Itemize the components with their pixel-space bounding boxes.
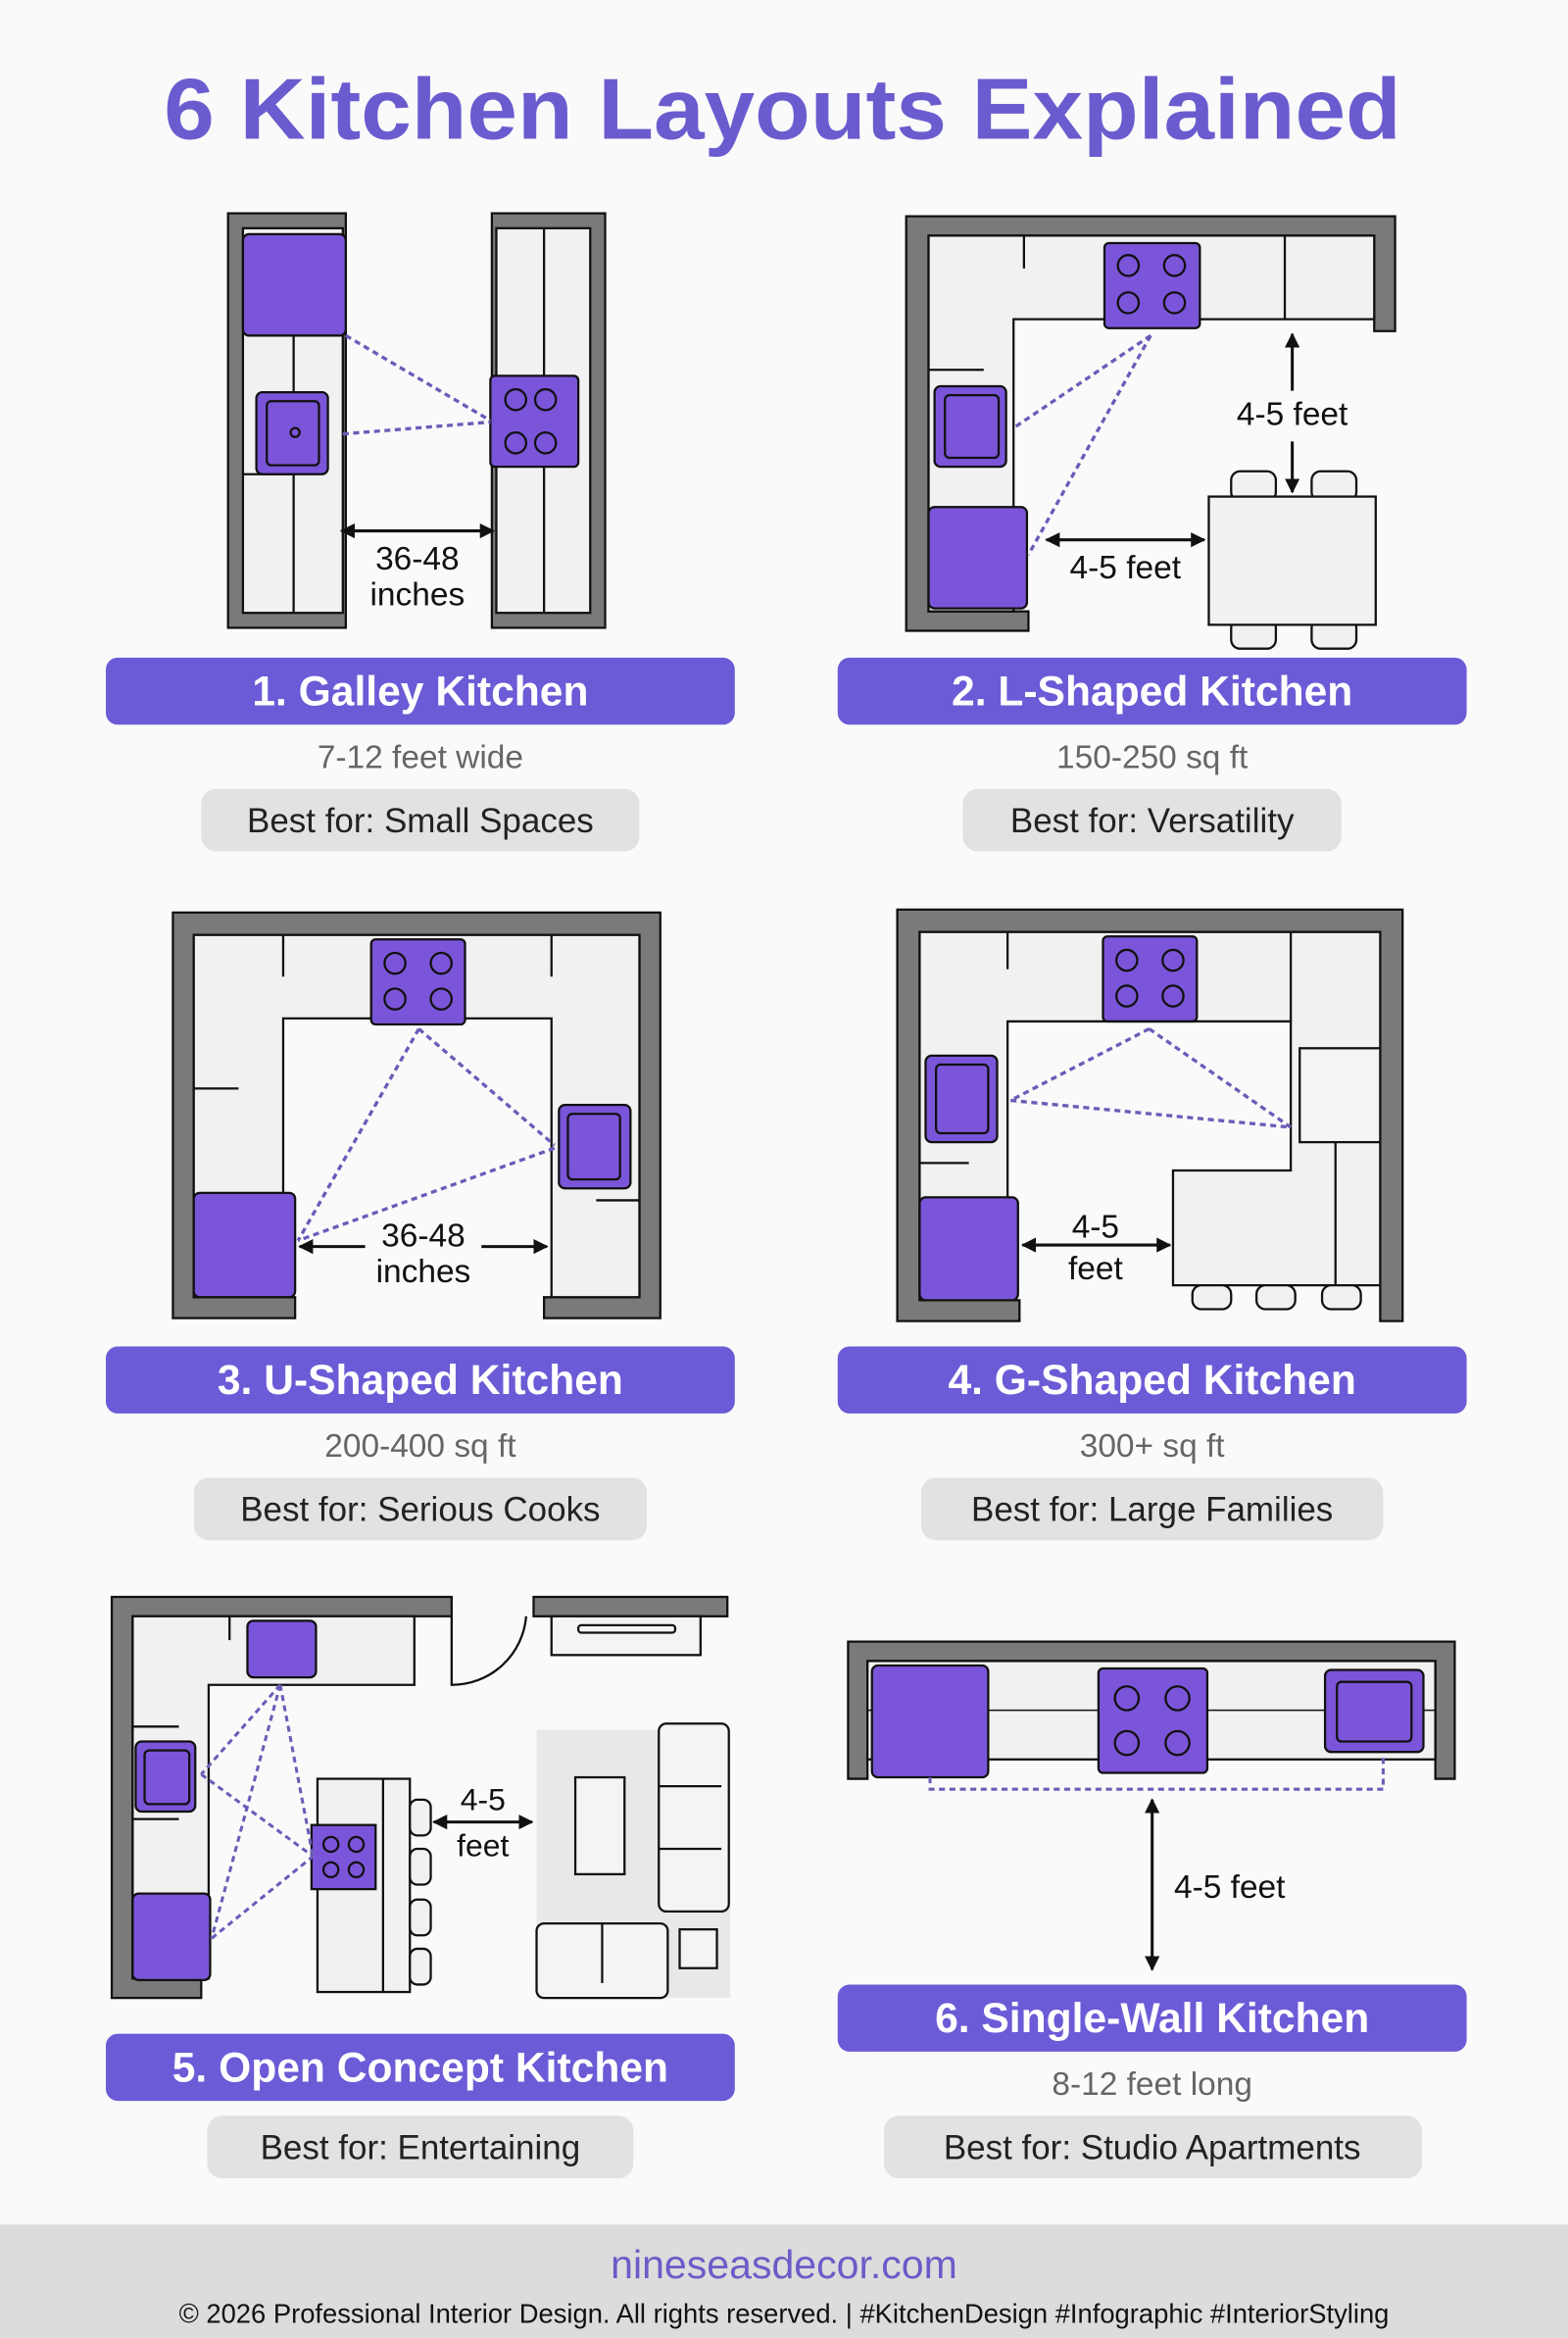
pill: U-shaped best for: [194, 1477, 647, 1540]
heading: L-shaped: [838, 658, 1467, 724]
icon: fridge: [243, 234, 346, 335]
door: [452, 1617, 526, 1685]
icon: sinks: [135, 1620, 316, 1812]
pill: G-shaped best for: Best for: Large Families: [971, 1490, 1333, 1528]
pill: open concept best for: [207, 2115, 633, 2178]
panel: open concept kitchen plan: [112, 1597, 730, 1998]
icon: sink: [257, 392, 328, 474]
pill: G-shaped best for: [921, 1477, 1383, 1540]
text: feet: [1068, 1251, 1123, 1287]
icon: stove: [1104, 243, 1200, 328]
text: inches: [376, 1254, 470, 1290]
text: 4-5 feet: [1174, 1869, 1286, 1906]
footer: © 2026 Professional Interior Design. All rights reserved. | #KitchenDesign #Infographic #InteriorStyling: [179, 2299, 1389, 2329]
heading: U-shaped: 3. U-Shaped Kitchen: [218, 1357, 623, 1404]
pill: L-shaped best for: Best for: Versatility: [1010, 802, 1295, 840]
icon: stove: [1102, 936, 1197, 1021]
pill: galley best for: [201, 789, 639, 852]
icon: dishwasher: [1299, 1048, 1380, 1142]
arrow: open concept clearance: [434, 1821, 532, 1823]
heading: G-shaped: 4. G-Shaped Kitchen: [948, 1357, 1356, 1404]
heading: single-wall: [838, 1984, 1467, 2052]
footer: [0, 2224, 1568, 2338]
arrows: L-shaped clearance: [1047, 334, 1293, 540]
pill: galley best for: Best for: Small Spaces: [247, 802, 594, 840]
text: 4-5 feet: [1070, 550, 1182, 586]
heading: galley: 1. Galley Kitchen: [252, 668, 588, 715]
pill: open concept best for: Best for: Entertaining: [261, 2128, 580, 2166]
text: 36-48: [375, 541, 460, 577]
text: inches: [370, 577, 465, 614]
panel: G-shaped kitchen plan: [898, 910, 1402, 1321]
table with chairs: [1208, 472, 1376, 649]
pill: L-shaped best for: [963, 789, 1342, 852]
icon: stove: [1099, 1668, 1207, 1772]
arrow: galley width: [341, 530, 493, 532]
panel: L-shaped kitchen plan: [906, 217, 1396, 649]
heading: U-shaped: [106, 1346, 735, 1414]
stools: [1193, 1285, 1361, 1309]
text: 7-12 feet wide: [318, 739, 523, 775]
text: 36-48: [381, 1219, 466, 1255]
heading: single-wall: 6. Single-Wall Kitchen: [935, 1995, 1369, 2042]
pill: single-wall best for: [884, 2115, 1422, 2178]
arrow: G-shaped clearance: [1022, 1244, 1170, 1246]
icon: fridge: [872, 1666, 988, 1777]
footer: nineseasdecor.com: [611, 2242, 957, 2287]
heading: L-shaped: 2. L-Shaped Kitchen: [952, 668, 1352, 715]
title: 6 Kitchen Layouts Explained: [164, 61, 1401, 158]
text: 8-12 feet long: [1052, 2066, 1252, 2103]
arrow: single-wall clearance: [1152, 1800, 1153, 1969]
text: 200-400 sq ft: [324, 1428, 516, 1465]
icon: fridge: [919, 1197, 1018, 1300]
text: 300+ sq ft: [1080, 1428, 1225, 1465]
icon: fridge: [132, 1894, 210, 1980]
text: 4-5: [461, 1781, 506, 1816]
panel: galley kitchen plan: [228, 214, 605, 627]
text: 4-5 feet: [1237, 397, 1348, 433]
panel: U-shaped kitchen plan: [172, 913, 661, 1318]
heading: G-shaped: [838, 1346, 1467, 1414]
heading: open concept: 5. Open Concept Kitchen: [172, 2044, 668, 2091]
text: 4-5: [1072, 1209, 1119, 1245]
icon: fridge: [929, 507, 1027, 609]
pill: U-shaped best for: Best for: Serious Cooks: [240, 1490, 601, 1528]
icon: stove: [371, 939, 466, 1024]
panel: single-wall kitchen plan: [848, 1642, 1454, 1779]
text: feet: [457, 1828, 510, 1864]
icon: sink: [1325, 1670, 1423, 1752]
icon: sink: [925, 1056, 997, 1142]
icon: sink: [559, 1105, 630, 1188]
icon: stove: [490, 375, 578, 467]
text: 150-250 sq ft: [1056, 739, 1249, 775]
living area: [537, 1723, 730, 1998]
icon: sink: [935, 386, 1006, 467]
island: [312, 1779, 431, 1992]
heading: open concept: [106, 2034, 735, 2101]
heading: galley: [106, 658, 735, 724]
icon: fridge: [194, 1193, 295, 1297]
pill: single-wall best for: Best for: Studio Apartments: [944, 2128, 1361, 2166]
arrow: U-shaped width: [300, 1246, 547, 1248]
